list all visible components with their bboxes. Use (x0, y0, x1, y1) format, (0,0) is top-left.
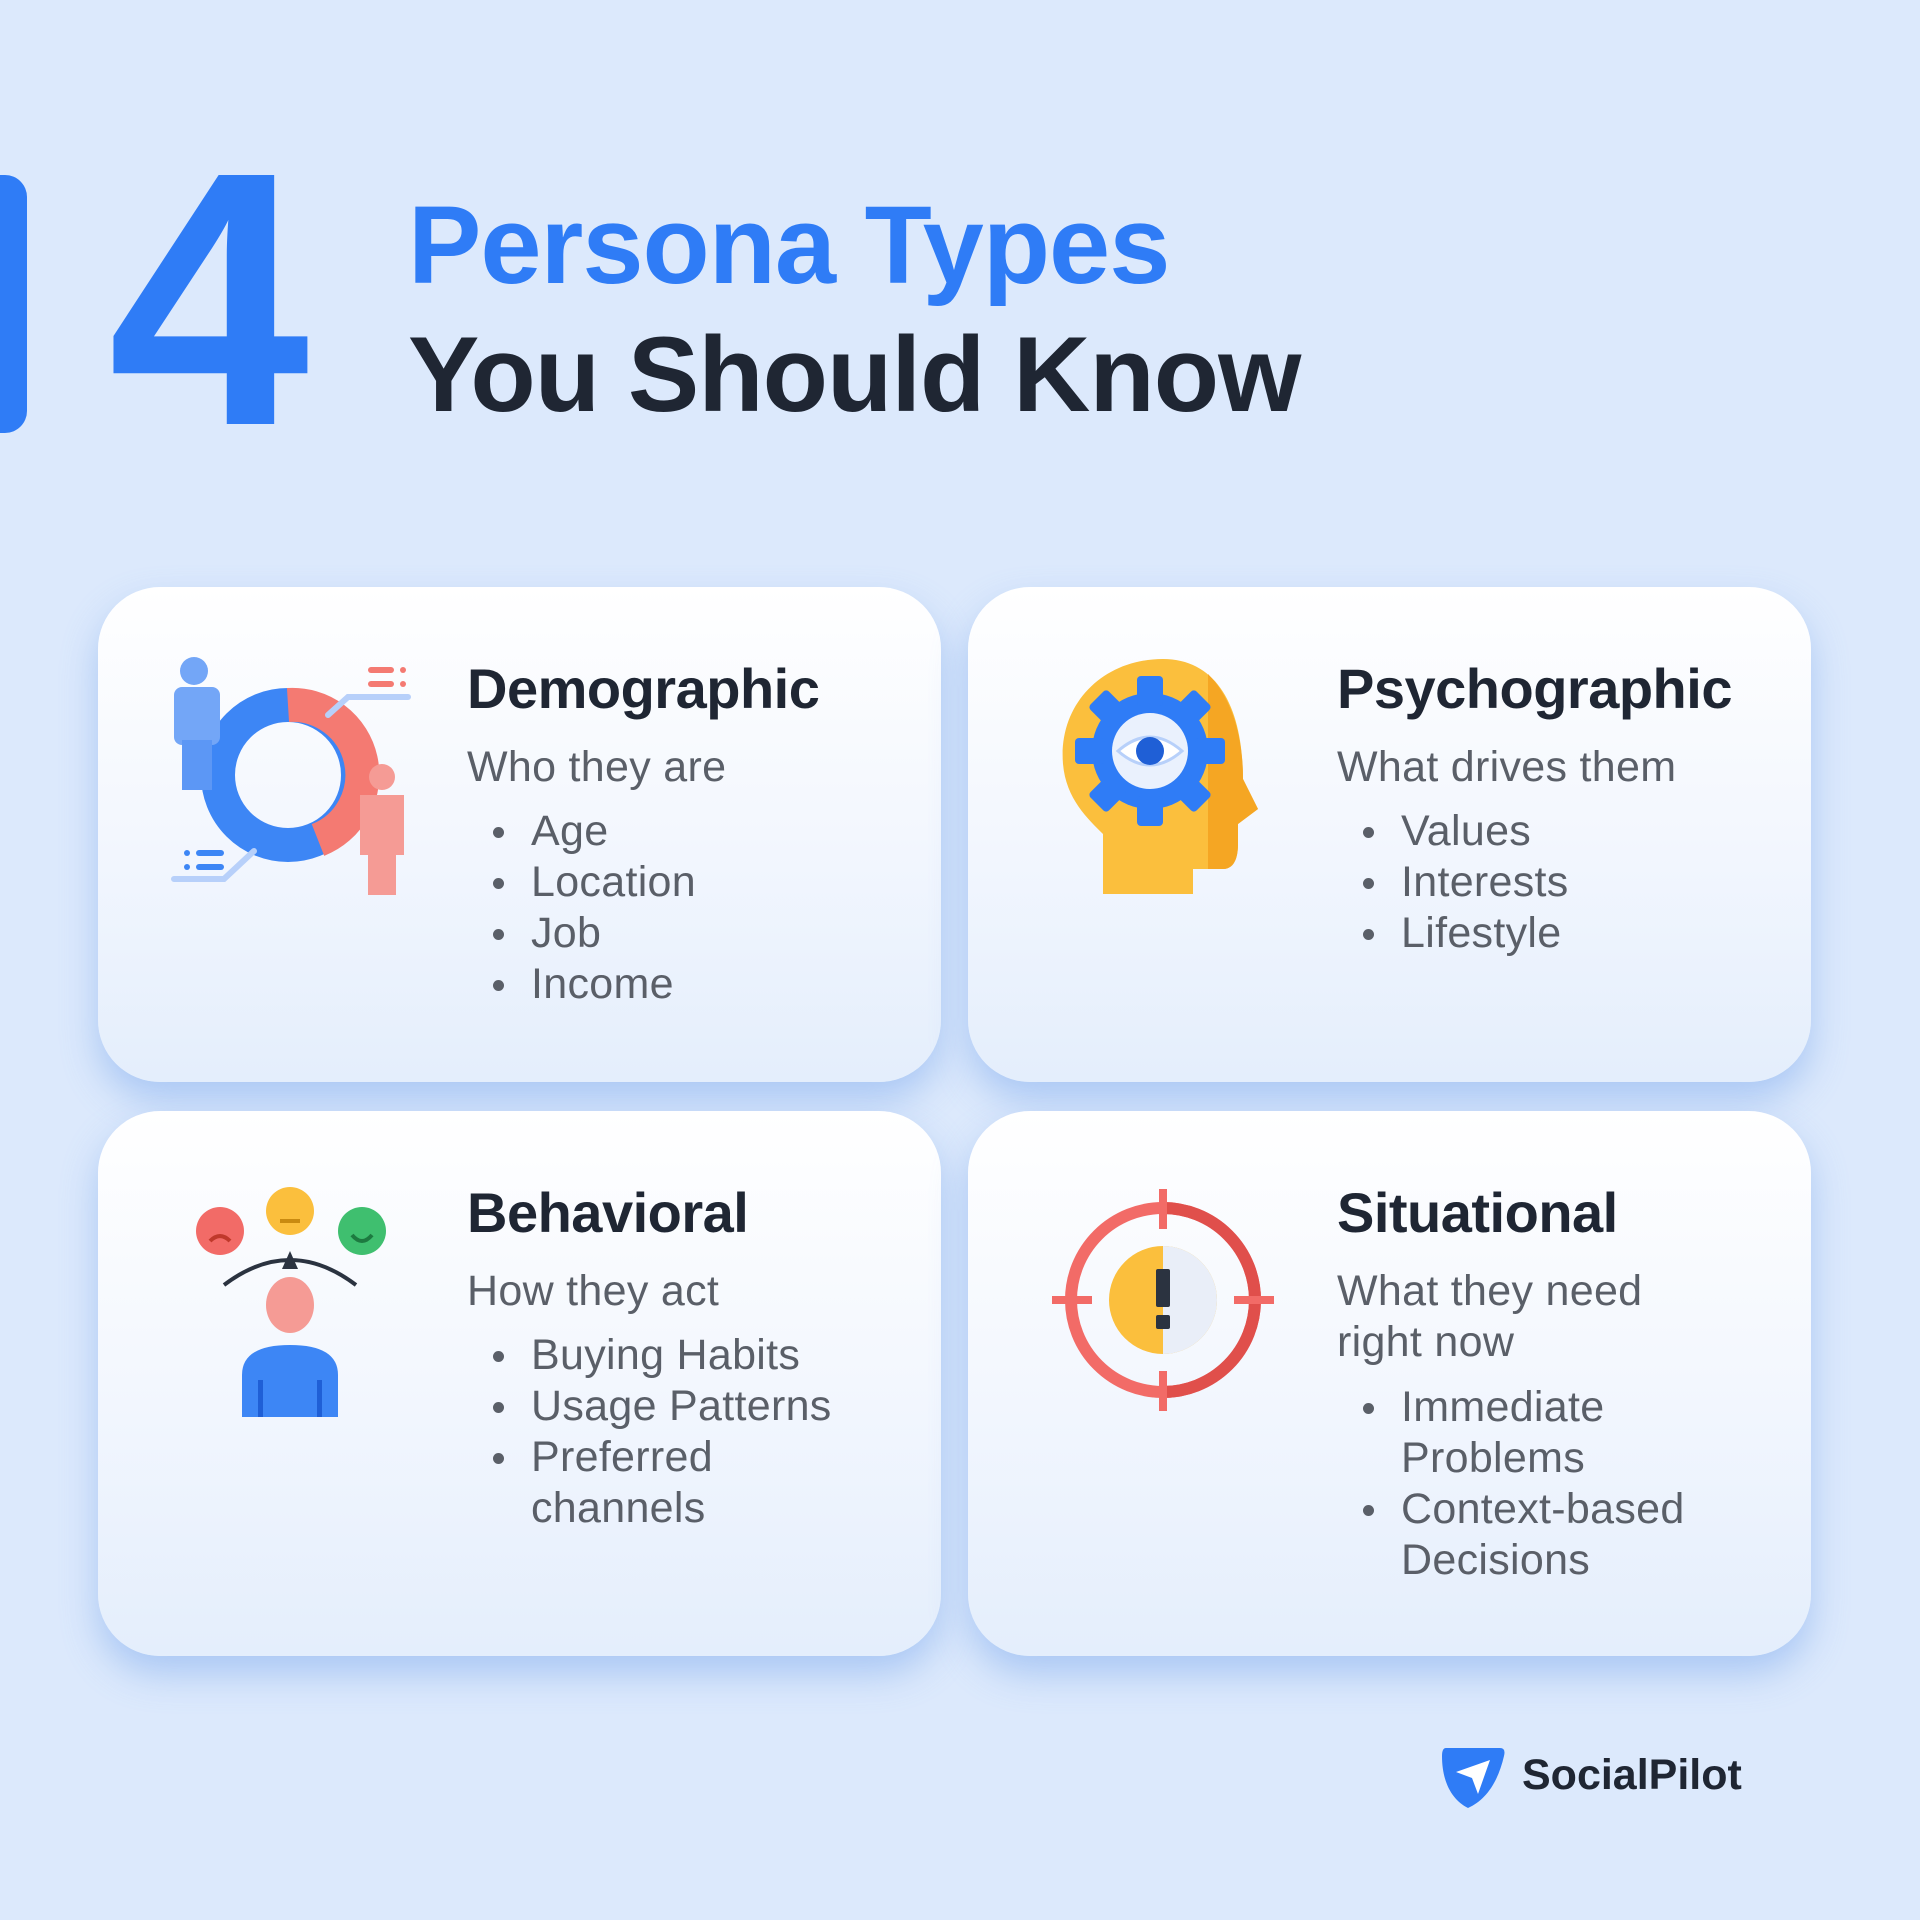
subtitle: Who they are (467, 743, 726, 791)
bullet list: Immediate (1401, 1383, 1604, 1431)
bullet list: Problems (1401, 1434, 1585, 1482)
bullet list: Age (531, 807, 608, 855)
bullet list (493, 807, 696, 1008)
brand name: SocialPilot (1522, 1751, 1742, 1799)
heading: Psychographic (1337, 657, 1732, 720)
panel: psychographic (968, 587, 1811, 1082)
panel: situational (968, 1111, 1811, 1656)
bullet list: Interests (1401, 858, 1569, 906)
heading: Demographic (467, 657, 819, 720)
decorative left blue bar (0, 175, 27, 433)
title (408, 184, 1302, 434)
bullet list: Buying Habits (531, 1331, 800, 1379)
heading: Situational (1337, 1181, 1618, 1244)
bullet list: Decisions (1401, 1536, 1590, 1584)
bullet list (493, 1331, 832, 1532)
bullet list: Job (531, 909, 601, 957)
subtitle: How they act (467, 1267, 719, 1315)
heading: Behavioral (467, 1181, 748, 1244)
icon: demographic donut chart with people (171, 657, 411, 895)
bullet list: channels (531, 1484, 706, 1532)
icon: target with exclamation (1052, 1189, 1274, 1411)
bullet list: Lifestyle (1401, 909, 1561, 957)
title: Persona Types (408, 184, 1169, 307)
logo: SocialPilot (1442, 1748, 1742, 1808)
bullet list: Values (1401, 807, 1531, 855)
subtitle: What they need (1337, 1267, 1642, 1315)
panel: behavioral (98, 1111, 941, 1656)
bullet list: Income (531, 960, 674, 1008)
icon: head with gear and eye (1062, 659, 1258, 894)
big number 4: 4 (108, 96, 299, 501)
title: You Should Know (408, 314, 1300, 434)
bullet list (1363, 807, 1569, 957)
bullet list: Location (531, 858, 696, 906)
subtitle: right now (1337, 1318, 1514, 1366)
panel: demographic (98, 587, 941, 1082)
icon: person with mood faces (196, 1187, 386, 1417)
subtitle (1337, 1267, 1642, 1366)
icon: paper plane shield (1442, 1748, 1504, 1808)
bullet list: Usage Patterns (531, 1382, 832, 1430)
bullet list: Context-based (1401, 1485, 1685, 1533)
bullet list (1363, 1383, 1685, 1584)
subtitle: What drives them (1337, 743, 1676, 791)
bullet list: Preferred (531, 1433, 713, 1481)
